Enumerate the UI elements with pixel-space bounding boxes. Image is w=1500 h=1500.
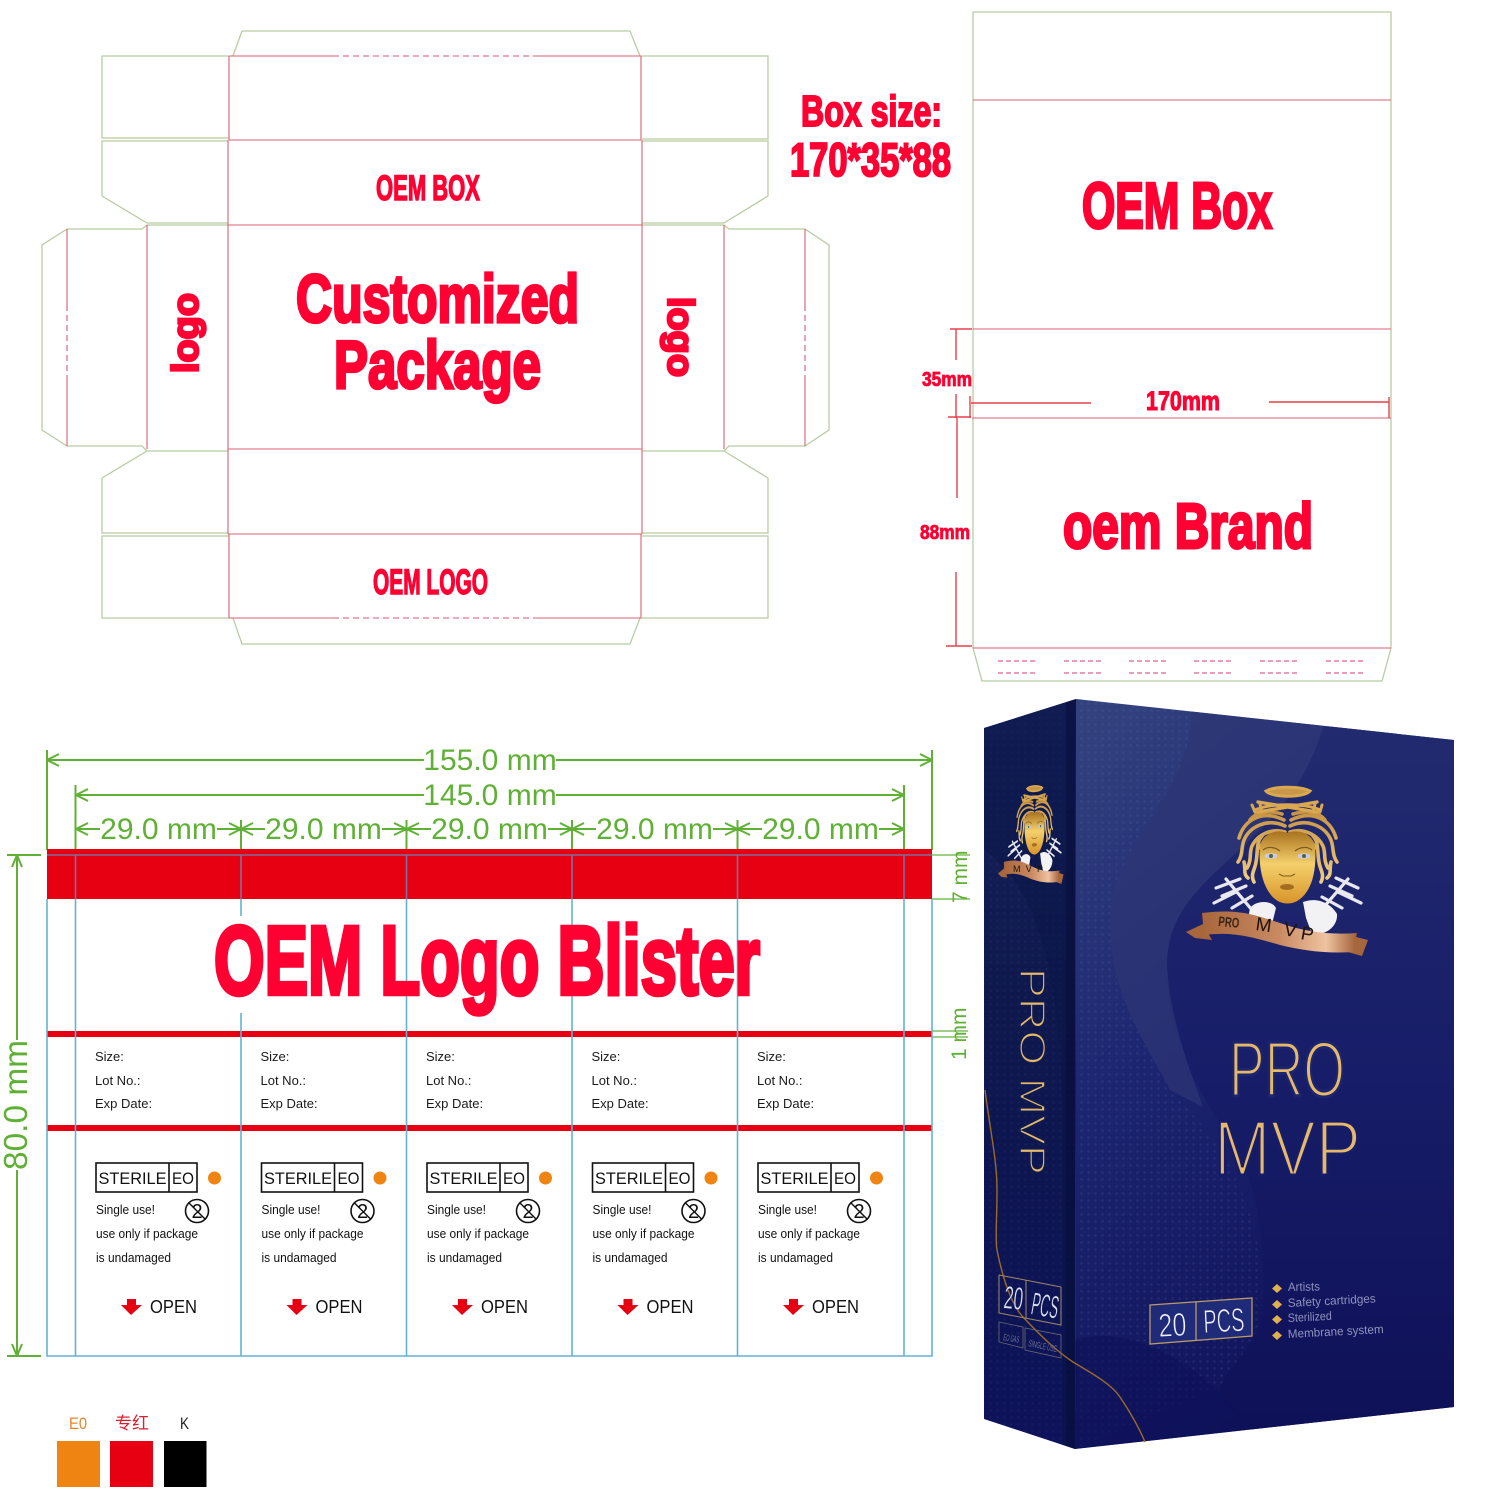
arrow and OPEN (618, 1297, 694, 1317)
side small badges (999, 1322, 1061, 1358)
sterile badge: EO (834, 1169, 856, 1188)
arrow and OPEN: OPEN (150, 1297, 197, 1317)
lot details: Size: (260, 1049, 289, 1064)
arrow and OPEN (286, 1297, 362, 1317)
feature list: Safety cartridges (1287, 1291, 1376, 1310)
panel: colour legend (57, 1414, 206, 1487)
lot details: Lot No.: (757, 1073, 803, 1088)
lot details: Exp Date: (592, 1096, 649, 1111)
sterile badge: STERILE (264, 1169, 332, 1188)
single use note: Single use! (592, 1202, 652, 1217)
top edge highlight (984, 699, 1076, 731)
badge: 20 PCS front: PCS (1202, 1301, 1245, 1340)
label: left logo: logo (165, 293, 206, 373)
dimension: 155.0 mm (47, 744, 932, 850)
feature list: Sterilized (1287, 1309, 1332, 1325)
side title: PRO MVP: PRO MVP (1012, 968, 1053, 1175)
dimension: 29.0 mm columns: 29.0 mm (762, 813, 879, 846)
lot details: Lot No.: (260, 1073, 306, 1088)
dimension: 170mm: 170mm (1146, 386, 1220, 416)
single use note: Single use! (427, 1202, 486, 1217)
badge: 20 PCS side (999, 1275, 1062, 1326)
single use note (262, 1202, 364, 1265)
dimension: 29.0 mm columns (76, 813, 904, 850)
sterile badge (262, 1163, 362, 1192)
perforated lines (67, 56, 805, 618)
icon: do not reuse (351, 1200, 374, 1223)
outer outline (973, 12, 1391, 681)
sterile badge: STERILE (98, 1169, 166, 1188)
panel: flat box panel with dimensions (920, 12, 1391, 681)
icon: do not reuse: 2 (688, 1201, 699, 1223)
lot details: Size: (592, 1049, 620, 1064)
single use note: use only if package (592, 1226, 694, 1241)
icon: do not reuse (682, 1200, 705, 1223)
single use note: is undamaged (592, 1250, 668, 1265)
perforation dashes (998, 661, 1366, 673)
arrow and OPEN: OPEN (316, 1297, 362, 1317)
orange dot (208, 1172, 221, 1184)
single use note: use only if package (262, 1226, 364, 1241)
dimension: 145.0 mm (76, 779, 904, 850)
icon: do not reuse (186, 1200, 208, 1223)
single use note: Single use! (758, 1202, 817, 1217)
single use note (427, 1202, 529, 1265)
icon: do not reuse (848, 1200, 870, 1223)
red separator lower (47, 1125, 932, 1131)
single use note: Single use! (96, 1202, 155, 1217)
bottom dust tab (233, 618, 640, 644)
heading: box size: Box size: (801, 87, 942, 136)
dimension: 35mm (922, 329, 972, 418)
blister column 1 (95, 1049, 221, 1317)
feature bullets (1272, 1284, 1282, 1340)
single use note: use only if package (758, 1226, 860, 1241)
icon: do not reuse: 2 (357, 1201, 368, 1223)
icon: do not reuse: 2 (522, 1201, 534, 1223)
heading: box size (790, 87, 951, 186)
arrow and OPEN: OPEN (812, 1297, 859, 1317)
sterile badge: EO (172, 1169, 194, 1188)
blister column 4 (592, 1049, 718, 1317)
logo: front emblem: PRO (1218, 913, 1240, 931)
dimension: 35mm: 35mm (922, 369, 972, 391)
lot details: Lot No.: (592, 1073, 637, 1088)
gold curve (985, 1090, 1145, 1442)
single use note: Single use! (262, 1202, 320, 1217)
logo: side emblem: M V P (1013, 864, 1043, 874)
dimension: 7 mm: 7 mm (949, 850, 972, 903)
lot details: Lot No.: (426, 1073, 472, 1088)
lot details (592, 1049, 649, 1111)
lot details: Exp Date: (426, 1096, 483, 1111)
single use note: use only if package (96, 1226, 198, 1241)
arrow and OPEN (452, 1297, 528, 1317)
logo: side emblem (998, 784, 1064, 888)
logo: front emblem: P (1299, 923, 1315, 946)
heading: Customized Package (296, 261, 579, 403)
heading: OEM Logo Blister: OEM Logo Blister (214, 906, 760, 1015)
arrow and OPEN: OPEN (646, 1297, 694, 1317)
panel: blister layout (0, 744, 972, 1356)
arrow and OPEN (783, 1297, 859, 1317)
lot details: Size: (757, 1049, 786, 1064)
sterile badge (427, 1163, 528, 1192)
single use note: is undamaged (758, 1250, 833, 1265)
label: right logo: logo (660, 297, 701, 377)
side small badges: SINGLE USE (1028, 1338, 1058, 1354)
dot texture (1080, 702, 1263, 1384)
single use note: is undamaged (262, 1250, 336, 1265)
dimension: 7 mm (932, 850, 972, 903)
bottom dark tone (1075, 1336, 1250, 1449)
lot details: Size: (426, 1049, 455, 1064)
dimension: 1 mm: 1 mm (948, 1008, 971, 1060)
panel: retail box mockup (984, 699, 1500, 1450)
dimension: 170mm (970, 386, 1389, 418)
sterile badge: STERILE (595, 1169, 663, 1188)
arrow and OPEN: OPEN (481, 1297, 528, 1317)
swatch: spot red (110, 1414, 153, 1487)
sterile badge: EO (503, 1169, 525, 1188)
lot details: Exp Date: (95, 1096, 152, 1111)
orange dot (374, 1172, 386, 1184)
label: OEM LOGO: OEM LOGO (373, 563, 488, 602)
fold lines (972, 100, 1391, 648)
panel: box dieline (42, 31, 829, 644)
swatch: spot red: 专红 (115, 1414, 149, 1433)
background wave darker (1167, 726, 1454, 1430)
dimension: 88mm (920, 418, 972, 646)
logo: front emblem (1186, 787, 1368, 956)
top dust tab (233, 31, 640, 56)
dimension: 29.0 mm columns: 29.0 mm (431, 813, 548, 846)
dimension: 1 mm (932, 1008, 971, 1060)
swatch: black: K (180, 1414, 190, 1433)
title: PRO: PRO (1229, 1025, 1345, 1113)
sterile badge: EO (338, 1169, 360, 1188)
box front face (1075, 699, 1454, 1449)
orange dot (539, 1172, 552, 1184)
lot details (426, 1049, 483, 1111)
dimension: 29.0 mm columns: 29.0 mm (596, 813, 713, 846)
dimension: 155.0 mm: 155.0 mm (423, 744, 557, 777)
panel: retail box mockup: PCS (1029, 1285, 1062, 1326)
single use note: is undamaged (427, 1250, 502, 1265)
lot details (757, 1049, 814, 1111)
lot details (260, 1049, 318, 1111)
sterile badge (758, 1163, 859, 1192)
heading: Customized Package: Package (334, 327, 541, 403)
swatch: EO orange (57, 1414, 100, 1487)
icon: do not reuse: 2 (191, 1201, 203, 1223)
sterile badge: EO (668, 1169, 690, 1188)
logo: front emblem: M (1254, 914, 1273, 937)
lot details (95, 1049, 152, 1111)
heading: Customized Package: Customized (296, 261, 579, 337)
label: OEM BOX: OEM BOX (376, 169, 480, 208)
badge: 20 PCS front: 20 (1157, 1306, 1187, 1344)
sterile badge (96, 1163, 197, 1192)
lot details: Exp Date: (757, 1096, 814, 1111)
title: MVP: MVP (1214, 1104, 1361, 1192)
badge: 20 PCS front (1150, 1298, 1252, 1344)
cut lines over red band (47, 855, 932, 899)
icon: do not reuse (516, 1200, 540, 1223)
swatch: black (164, 1414, 206, 1487)
feature list: Artists (1288, 1279, 1320, 1294)
top red band (47, 849, 932, 899)
single use note: use only if package (427, 1226, 529, 1241)
right glue flaps (641, 56, 829, 618)
lot details: Exp Date: (260, 1096, 318, 1111)
dimension: 88mm: 88mm (920, 522, 970, 544)
sterile badge: STERILE (760, 1169, 828, 1188)
blister column 5 (757, 1049, 883, 1317)
logo: front emblem: V (1282, 919, 1299, 942)
cut lines (47, 899, 932, 1356)
single use note (758, 1202, 860, 1265)
label: oem Brand: oem Brand (1063, 490, 1313, 562)
single use note: is undamaged (96, 1250, 171, 1265)
lot details: Lot No.: (95, 1073, 141, 1088)
sterile badge: STERILE (430, 1169, 498, 1188)
red separator upper (47, 1031, 932, 1037)
side small badges: EO GAS (1003, 1332, 1020, 1345)
arrow and OPEN (121, 1297, 197, 1317)
dimension: 29.0 mm columns: 29.0 mm (100, 813, 217, 846)
background wave lighter (1110, 700, 1323, 1107)
dimension: 29.0 mm columns: 29.0 mm (265, 813, 382, 846)
blister column 2 (260, 1049, 386, 1317)
sterile badge (592, 1163, 694, 1192)
badge: 20 PCS side: 20 (1002, 1279, 1025, 1317)
feature list (1272, 1279, 1384, 1341)
heading: box size: 170*35*88 (790, 133, 951, 186)
lot details: Size: (95, 1049, 124, 1064)
orange dot (704, 1172, 718, 1184)
fold lines (67, 56, 805, 618)
label: OEM Box: OEM Box (1082, 169, 1272, 242)
dimension: 80.0 mm (0, 855, 41, 1356)
left glue flaps (42, 56, 229, 618)
single use note (592, 1202, 694, 1265)
dimension: 145.0 mm: 145.0 mm (423, 779, 557, 812)
feature list: Membrane system (1287, 1322, 1384, 1341)
swatch: EO orange: E0 (69, 1414, 87, 1433)
blister column 3 (426, 1049, 552, 1317)
orange dot (870, 1172, 883, 1184)
single use note (96, 1202, 198, 1265)
box side face (984, 699, 1076, 1449)
icon: do not reuse: 2 (853, 1201, 865, 1223)
